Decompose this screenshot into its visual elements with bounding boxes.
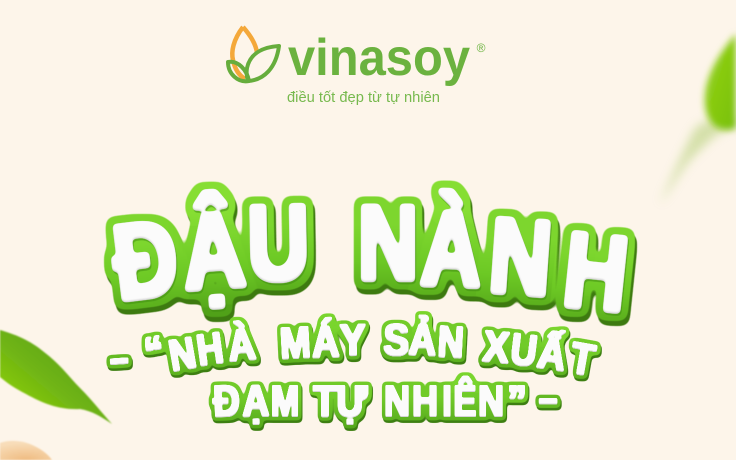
- subtitle: “NHÀ MÁY SẢN XUẤT ĐẠM TỰ NHIÊN”: [108, 314, 599, 426]
- line 2: ”: [507, 376, 527, 425]
- line 2: M: [271, 377, 299, 426]
- line 1: S: [383, 314, 410, 365]
- line 1: T: [567, 332, 599, 385]
- title: ĐẬU NÀNH: Đ: [106, 197, 185, 324]
- line 2: I: [442, 377, 452, 426]
- line 2: Đ: [212, 375, 241, 426]
- line 2: H: [412, 377, 438, 426]
- line 2: N: [384, 377, 410, 426]
- logo: vinasoy: [228, 27, 486, 106]
- line 1: Á: [311, 317, 340, 367]
- title: ĐẬU NÀNH: [106, 181, 634, 335]
- line 1: [140, 314, 599, 385]
- line 1: N: [165, 328, 200, 381]
- line 2: Ê: [454, 377, 476, 426]
- line 1: À: [226, 319, 257, 371]
- title: ĐẬU NÀNH: N: [358, 182, 418, 303]
- line 1: U: [508, 324, 540, 376]
- line 1: Y: [339, 314, 366, 365]
- registered mark: ®: [477, 41, 486, 55]
- line 1: Ấ: [535, 327, 569, 380]
- icon: green leaf top right: [660, 34, 736, 204]
- icon: soybean bottom left: [0, 441, 52, 460]
- line 1: H: [194, 323, 226, 376]
- line 1: M: [279, 317, 312, 369]
- line 1: Ả: [408, 315, 437, 365]
- line 1: X: [481, 321, 512, 373]
- tagline: điều tốt đẹp từ tự nhiên: [287, 90, 440, 106]
- dash right: –: [539, 375, 557, 423]
- line 2: N: [478, 377, 504, 426]
- title: ĐẬU NÀNH: H: [558, 209, 634, 335]
- title: ĐẬU NÀNH: U: [246, 181, 311, 304]
- line 2: T: [313, 376, 337, 426]
- line 1: N: [436, 317, 465, 368]
- dash left: –: [108, 334, 130, 384]
- icon: vinasoy leaves: [228, 27, 279, 81]
- title: ĐẬU NÀNH: Ậ: [178, 188, 249, 313]
- wordmark: vinasoy: [288, 29, 470, 87]
- line 2: [212, 375, 527, 426]
- line 2: Ự: [336, 376, 368, 426]
- line 1: “: [140, 326, 168, 378]
- line 2: Ạ: [242, 376, 270, 426]
- title: ĐẬU NÀNH: À: [419, 187, 484, 310]
- title: ĐẬU NÀNH: N: [485, 194, 556, 319]
- icon: green leaf bottom left: [0, 330, 112, 424]
